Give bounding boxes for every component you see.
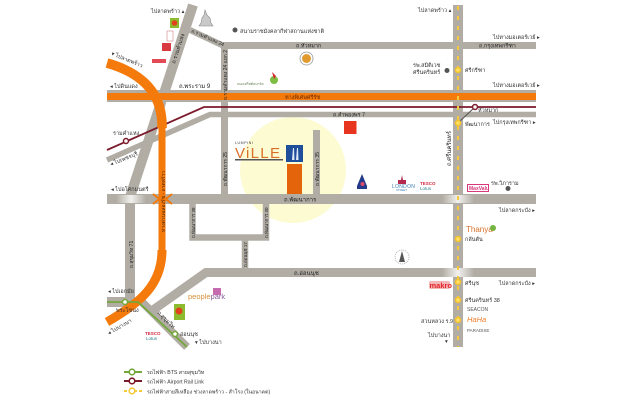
logo: flower emblem	[270, 72, 278, 84]
label: Phatthanakan 25 (west): ถ.พัฒนาการ 25	[223, 152, 229, 186]
label: Phatthanakan 25 (east): ถ.พัฒนาการ 35	[315, 152, 321, 186]
label: Sukhumvit road: ถ.สุขุมวิท	[156, 309, 177, 330]
expressway: north-south	[107, 63, 162, 322]
logo: round seal	[300, 52, 313, 65]
label: Phatthanakan station: พัฒนาการ	[465, 121, 490, 128]
label: Srinagarin 38 station: ศรีนครินทร์ 38	[465, 297, 500, 304]
icon: stadium dot	[232, 28, 238, 32]
project logo: Lumpini Ville: ViLLE	[235, 145, 281, 162]
logo: HaHa: HaHa	[467, 315, 486, 324]
expressway: Si Rat	[107, 93, 536, 100]
airport rail link line	[107, 107, 536, 150]
project logo: Lumpini Ville	[235, 141, 303, 162]
logo: Makro: makro	[430, 281, 452, 290]
label: Phra Khanong station: พระโขนง	[116, 306, 139, 314]
logo: temple top	[199, 10, 213, 26]
airport rail link stations	[124, 104, 478, 144]
label: Phatthanakan road: ถ.พัฒนาการ	[284, 196, 317, 204]
label: expressway name: ทางด่วนฉลองรัช - ลาดพร้าว	[160, 171, 167, 232]
logo: MaxValu: MaxValu	[469, 186, 489, 192]
logo: London Street	[392, 175, 415, 192]
logo: navy emblem	[357, 174, 367, 189]
label: go Lat Krabang 1: ไปลาดกระบัง ▸	[498, 207, 535, 214]
label: Rajamangala stadium: สนามราชมังคลากีฬาสถานแห่งชาติ	[240, 28, 324, 35]
label: go Ekkamai: ◂ ไปเอกมัย	[108, 288, 134, 295]
interchange connector	[458, 107, 475, 123]
label: Ramkhamhaeng station: รามคำแหง	[113, 130, 140, 137]
project logo: Lumpini Ville: LUMPINI	[235, 141, 253, 145]
label: go motorway 2: ไปทางมอเตอร์เวย์ ▸	[492, 82, 540, 89]
label: Ramkhamhaeng road: ถ.รามคำแหง	[170, 33, 187, 65]
label: Wibharam hospital: รพ.วิภาราม	[491, 180, 519, 187]
label: go Din Daeng: ◂ ไปดินแดง	[110, 83, 138, 90]
logo: Tesco Lotus	[420, 181, 436, 191]
legend: รถไฟฟ้าสายสีเหลือง ช่วงลาดพร้าว - สำโรง (ในอนาคต)	[147, 388, 270, 396]
logo: Thai residence: เดอะคริสตัลปาร์ค	[237, 82, 264, 86]
logo: Seacon: SEACON	[467, 307, 489, 313]
expressway interchange marks	[153, 194, 172, 204]
label: Hua Mak station: หัวหมาก	[478, 107, 498, 114]
logo: Tesco Lotus south: Lotus	[146, 336, 158, 341]
logo: Tesco Lotus: Lotus	[420, 186, 432, 191]
logo: London Street: LONDON	[392, 184, 415, 190]
BTS stations	[122, 300, 178, 336]
label: go Lat Phrao (left): ▾ ไปลาดพร้าว	[110, 50, 144, 69]
label: go Krungthep Kreetha: ไปกรุงเทพกรีฑา ▸	[492, 119, 536, 126]
label: go Bang Na (right): ไปบางนา	[427, 332, 450, 339]
label: Sukhumvit 71: ถ.สุขุมวิท 71	[128, 241, 135, 268]
label: Si Rat expressway: ทางพิเศษศรีรัช	[285, 94, 320, 101]
label: go motorway 1: ไปทางมอเตอร์เวย์ ▸	[492, 34, 540, 41]
label: Samitivej hospital: รพ.สมิติเวช	[413, 62, 441, 69]
label: go Lat Phrao (top): ไปลาดพร้าว ▴	[417, 7, 452, 14]
label: Hua Mak road: ถ.หัวหมาก	[296, 42, 321, 50]
bridge highlights	[116, 195, 474, 277]
label: Srinagarin road: ถ.ศรีนครินทร์	[445, 130, 453, 166]
yellow line (dashed)	[457, 6, 459, 347]
label: Suan Luang station: สวนหลวง ร.9	[421, 318, 453, 325]
label: Si Kreetha station: ศรีกรีฑา	[465, 67, 485, 74]
label: Krungthep Kreetha road: ถ.กรุงเทพกรีฑา	[479, 42, 516, 50]
project building block	[287, 164, 302, 194]
logo: Paradise: PARADISE	[467, 328, 489, 333]
BTS green line	[107, 302, 187, 347]
legend	[124, 368, 270, 396]
logo: Makro-like red	[152, 59, 166, 63]
label: Phatthanakan 38: ถ.พัฒนาการ 38	[191, 207, 196, 238]
label: Rama 9 road: ถ.พระราม 9	[179, 83, 211, 90]
logo: People Park	[188, 288, 225, 301]
label: go Lat Krabang 2: ไปลาดกระบัง ▸	[498, 280, 535, 287]
label: go Bang Na: ▾ ไปบางนา	[195, 339, 222, 346]
label: go Bang Na (left): ◂ ไปบางนา	[106, 317, 133, 337]
logo: London Street: STREET	[396, 188, 407, 192]
label: On Nut 17: ถ.อ่อนนุช 17	[243, 242, 249, 267]
label: On Nut station: อ่อนนุช	[180, 331, 198, 338]
label: go Asok: ◂ ไปอโศกมนตรี	[111, 185, 149, 193]
labels: top left: ไปลาดพร้าว ▴	[150, 8, 185, 15]
label: Klantan station: กลันตัน	[465, 236, 483, 243]
logo: Thanya Park: Thanya	[466, 225, 493, 234]
icon: hospital dot	[506, 186, 510, 191]
yellow line stations	[456, 68, 460, 322]
logo: Tesco Lotus south	[145, 331, 161, 341]
highlight circle: project area	[240, 117, 346, 223]
icon: hospital dot	[444, 68, 450, 73]
label: Lam Phong Phon road: ถ.ลำพองพร 7	[333, 112, 365, 118]
logo: temple emblem bottom	[395, 250, 409, 264]
arrow: down: ▾	[445, 339, 448, 345]
label: go Phetchaburi: ◂ ไปเพชรบุรี	[109, 150, 139, 168]
logo: Big C north	[170, 18, 179, 28]
logo: red sign	[162, 43, 171, 51]
label: Phatthanakan 30: ถ.พัฒนาการ 30	[264, 207, 269, 238]
label: On Nut road: ถ.อ่อนนุช	[294, 270, 319, 277]
road network	[107, 5, 536, 347]
label: Ramkhamhaeng 24: ถ.รามคำแหง 24	[190, 28, 225, 48]
logo: Tesco Lotus south: TESCO	[145, 331, 161, 336]
logo: Tesco Lotus: TESCO	[420, 181, 436, 186]
logo: red box	[167, 31, 173, 41]
legend: รถไฟฟ้า BTS สายสุขุมวิท	[147, 368, 205, 376]
label: Ramkhamhaeng 24 sub-soi: ถ.รามคำแหง 24 แยก 2	[223, 50, 229, 100]
label: Samitivej hospital line 2: ศรีนครินทร์	[413, 69, 440, 76]
legend: รถไฟฟ้า Airport Rail Link	[147, 378, 204, 386]
label: Si Nut station: ศรีนุช	[465, 280, 479, 287]
logo: People Park: peoplepark	[188, 292, 225, 301]
building icon: red square	[344, 121, 356, 134]
logo: Big C south	[174, 304, 185, 320]
